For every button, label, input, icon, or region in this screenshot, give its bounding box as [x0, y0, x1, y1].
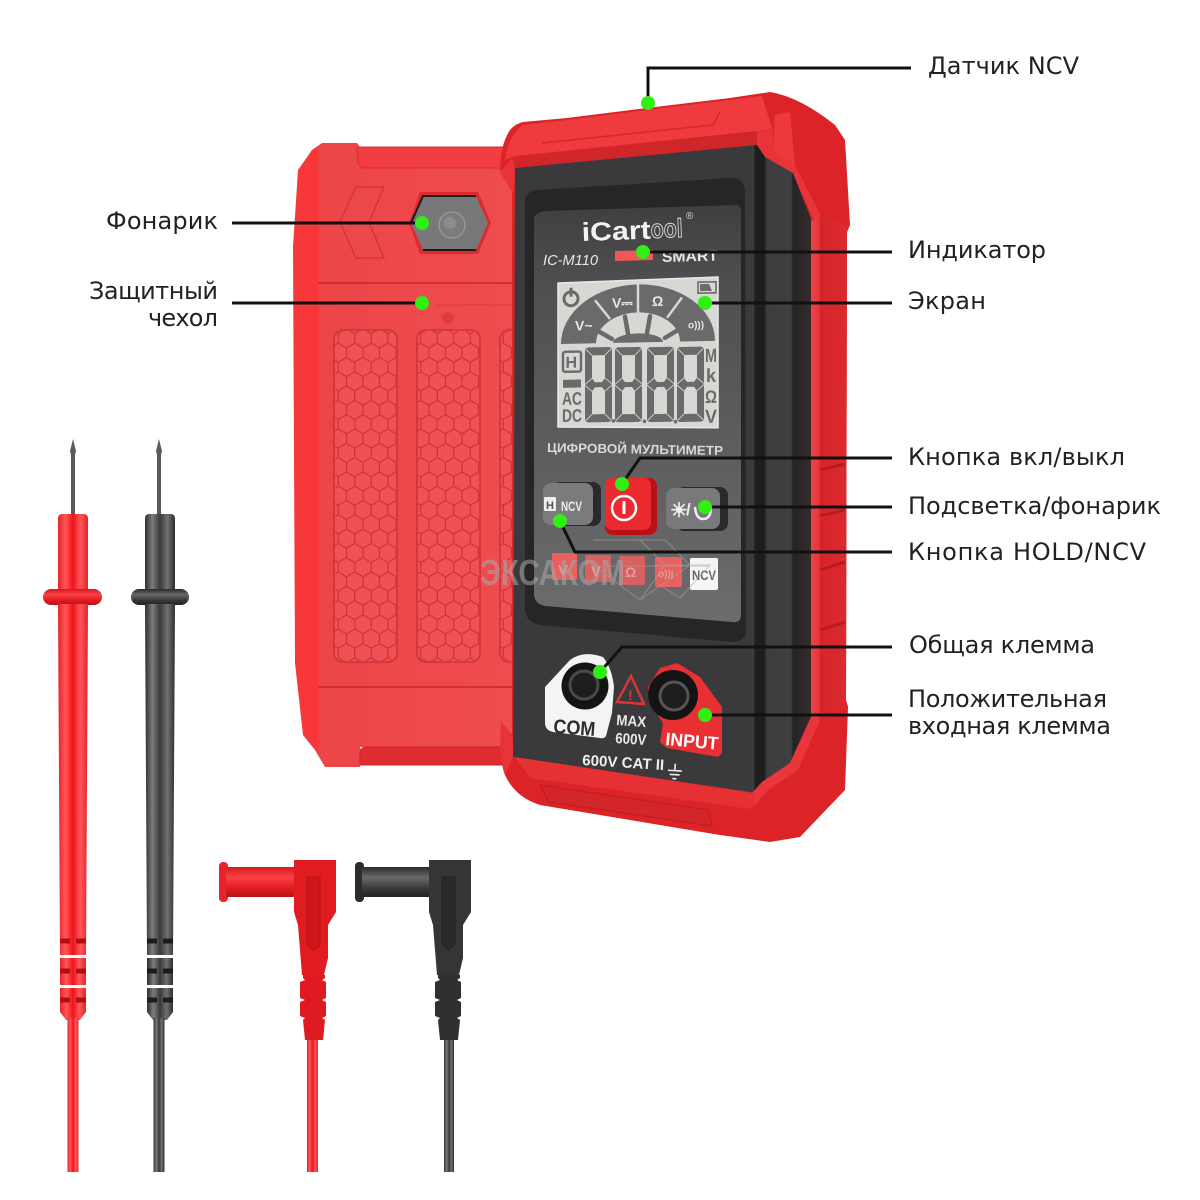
black angled plug: [355, 860, 471, 1172]
mode chips: [552, 553, 718, 590]
mode chips: V: [591, 563, 601, 580]
left rim bottom: [500, 722, 513, 775]
probe flange: [43, 589, 102, 605]
button: backlight flashlight: /: [686, 500, 691, 519]
callout: hold ncv button: [553, 514, 1147, 566]
model number: IC-M110: [543, 252, 599, 269]
button: backlight flashlight: [666, 487, 728, 531]
unit letters: k: [706, 366, 716, 387]
honeycomb panel 1: [334, 330, 397, 662]
device front face: [513, 145, 757, 793]
rim ridges: [820, 464, 845, 630]
mode arc: V⎓: [612, 294, 633, 311]
protective case: [293, 143, 530, 767]
probe needle: [156, 439, 162, 516]
probe handle: [58, 514, 88, 590]
plug strain relief: [435, 975, 461, 1040]
case thin line: [436, 304, 514, 306]
top rim shadow band: [512, 131, 768, 168]
device title text: ЦИФРОВОЙ МУЛЬТИМЕТР: [547, 440, 724, 458]
plug head: [429, 860, 471, 975]
minus bar: [563, 380, 581, 388]
mode chips: Ω: [625, 564, 636, 580]
callout: common terminal: Общая клемма: [909, 631, 1095, 659]
mode arc: o))): [688, 320, 704, 331]
case chevron: [340, 187, 384, 258]
callout: protective case: [89, 277, 429, 332]
top rim light: [505, 96, 772, 160]
honeycomb panel 3: [500, 330, 530, 662]
mode chips: V: [558, 562, 568, 579]
mode chips: o))j: [658, 569, 674, 580]
callout: common terminal: [593, 631, 1095, 679]
callout: positive input terminal: Положительная: [908, 685, 1107, 713]
right top corner bright: [773, 112, 795, 165]
category rating: [582, 752, 683, 779]
bottom corner band: [752, 717, 820, 805]
LCD screen: [558, 277, 718, 431]
plug head: [294, 860, 336, 975]
flashlight bezel: [409, 192, 491, 254]
strain relief bands: [60, 941, 86, 1000]
brand logo: ool: [650, 213, 683, 244]
warning triangle: [617, 676, 644, 704]
smart text: SMART: [662, 248, 718, 266]
callout: screen: Экран: [908, 287, 986, 315]
callout: backlight flashlight: Подсветка/фонарик: [908, 492, 1161, 520]
callout: power button: Кнопка вкл/выкл: [908, 443, 1125, 471]
probe needle: [70, 439, 76, 516]
seven-segment digit 1: [585, 347, 612, 422]
warning triangle: !: [628, 687, 633, 703]
plug wire: [307, 1040, 318, 1172]
probe wire: [154, 1018, 164, 1172]
indicator light: [615, 250, 653, 261]
battery icon: [698, 282, 716, 293]
strain relief bands: [147, 941, 173, 1000]
callout: indicator: [636, 236, 1046, 264]
window dark edge: [411, 196, 476, 250]
max voltage label: [615, 712, 647, 749]
red test probe: [43, 439, 102, 1172]
probe wire: [68, 1018, 78, 1172]
callout: backlight flashlight: [698, 492, 1161, 520]
unit letters: M: [705, 346, 717, 367]
button: backlight flashlight: ☀: [670, 500, 688, 522]
callout: positive input terminal: входная клемма: [908, 712, 1111, 740]
panel bevel: [525, 178, 746, 642]
decimal points: [612, 418, 677, 425]
callout: indicator: Индикатор: [908, 236, 1046, 264]
callout: NCV sensor: Датчик NCV: [928, 52, 1080, 80]
watermark: ЭКСАКОМ: [480, 552, 625, 593]
callout: flashlight: Фонарик: [106, 207, 218, 235]
multimeter device: [480, 92, 850, 842]
max voltage label: MAX: [616, 712, 647, 731]
seven-segment digit 4: [677, 347, 704, 422]
COM terminal: [545, 654, 614, 741]
callout: positive input terminal: [698, 685, 1111, 740]
callout: screen: [698, 287, 986, 315]
plug barrel: [226, 867, 296, 897]
black test probe: [131, 439, 189, 1172]
callout: hold ncv button: Кнопка HOLD/NCV: [908, 538, 1147, 566]
right top corner band: [757, 128, 820, 222]
plug barrel: [362, 867, 432, 897]
watermark: [480, 540, 710, 600]
power icon: [564, 288, 578, 306]
plug flange: [355, 862, 364, 902]
seven-segment digit 2: [615, 347, 642, 422]
AC DC: DC: [562, 406, 582, 426]
display panel: [534, 205, 741, 622]
brand logo: [581, 211, 694, 247]
max voltage label: 600V: [615, 730, 647, 749]
AC DC: AC: [562, 389, 582, 409]
mode arc: [561, 282, 715, 344]
device red shell: [500, 92, 850, 842]
COM terminal: COM: [553, 716, 596, 741]
probe strain relief: [60, 958, 86, 1020]
probe shaft: [145, 604, 175, 955]
honeycomb panel 2: [417, 330, 480, 662]
left rim top: [500, 158, 515, 192]
seven-segment digit 3: [647, 347, 674, 422]
bottom corner light: [515, 757, 755, 809]
case top step: [357, 147, 508, 168]
flashlight lens: [439, 212, 465, 238]
button: hold ncv: H: [546, 500, 554, 512]
small screw dot: [442, 312, 454, 324]
plug inset: [307, 877, 320, 950]
plug inset: [442, 877, 455, 950]
unit letters: [705, 346, 717, 428]
INPUT terminal: INPUT: [665, 729, 719, 754]
bottom inset: [540, 785, 712, 826]
probe shaft: [58, 604, 88, 955]
callout: flashlight: [106, 207, 429, 235]
mode arc: Ω: [652, 293, 663, 309]
probe handle: [145, 514, 175, 590]
mode arc: V~: [575, 317, 593, 334]
button: power: [605, 478, 657, 535]
callout: protective case: Защитный: [89, 277, 218, 305]
plug strain relief: [300, 975, 326, 1040]
case dividing lines: [318, 283, 514, 687]
mode chips: NCV: [692, 567, 717, 583]
brand logo: iCart: [581, 215, 652, 247]
hold icon: [563, 352, 581, 372]
unit letters: V: [705, 407, 717, 428]
red angled plug: [219, 860, 336, 1172]
flashlight window: [411, 196, 488, 250]
probe flange: [131, 589, 189, 605]
callout: power button: [615, 443, 1125, 491]
LCD background: [558, 277, 718, 431]
category rating: 600V CAT II: [582, 752, 665, 774]
plug flange: [219, 862, 228, 902]
device side face: [752, 145, 811, 793]
INPUT terminal: [648, 663, 722, 757]
button: hold ncv: NCV: [561, 498, 582, 514]
brand logo: ®: [686, 211, 694, 222]
probe strain relief: [147, 958, 173, 1020]
case body: [293, 143, 515, 767]
plug wire: [444, 1040, 454, 1172]
callout: protective case: чехол: [148, 304, 218, 332]
hold icon: H: [566, 355, 577, 372]
unit letters: Ω: [705, 387, 717, 407]
top rim inset: [542, 112, 720, 143]
AC DC: [562, 389, 582, 426]
case bottom step: [360, 747, 510, 765]
callout: NCV sensor: [641, 52, 1080, 110]
right side rim: [811, 214, 850, 720]
button: hold ncv: [543, 482, 601, 526]
